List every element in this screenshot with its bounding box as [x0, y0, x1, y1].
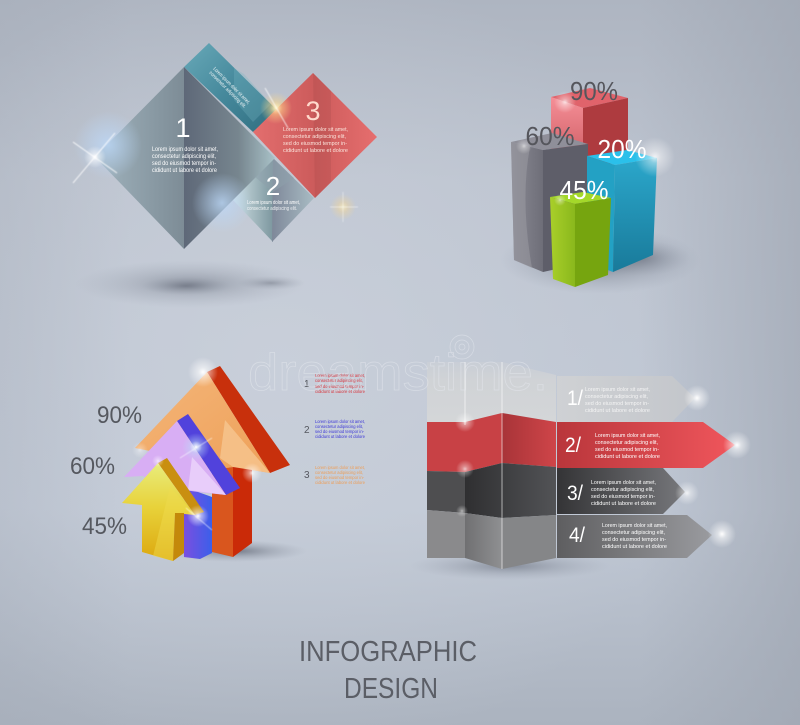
diamond 1: cididunt ut labore et dolore — [152, 168, 218, 174]
percentage labels: 45% — [82, 513, 127, 540]
legend item 2: Lorem ipsum dolor sit amet, — [315, 419, 365, 424]
percentage labels: 90% — [97, 402, 142, 429]
ribbon arrow 3: Lorem ipsum dolor sit amet, — [591, 480, 656, 486]
title — [299, 636, 477, 705]
ribbon arrow 2: consectetur adipiscing elit, — [595, 440, 658, 446]
ribbon arrow 2: Lorem ipsum dolor sit amet, — [595, 433, 660, 439]
value labels: 60% — [526, 121, 574, 151]
ribbon arrow 4: cididunt ut labore et dolore — [602, 544, 667, 550]
diamond 3: consectetur adipiscing elit, — [283, 134, 346, 140]
ribbon arrow 4 — [557, 515, 712, 558]
diamond 3: 3 — [305, 96, 321, 126]
ribbon arrow 4: sed do eiusmod tempor in- — [602, 537, 666, 543]
legend item 1: cididunt ut labore et dolore — [315, 389, 366, 394]
ribbon arrow 2: 2/ — [565, 434, 581, 457]
diamond 3 — [253, 73, 377, 198]
panel: 3D bar chart — [500, 76, 700, 294]
ribbon arrow 1: cididunt ut labore et dolore — [585, 408, 650, 414]
ribbon arrow 3 — [557, 468, 685, 514]
title: INFOGRAPHIC — [299, 636, 477, 668]
diamond 1: Lorem ipsum dolor sit amet, — [152, 147, 218, 153]
diamond 1 — [95, 67, 275, 249]
panel: folded ribbon infographic — [410, 362, 751, 580]
diamond 2: 2 — [266, 171, 280, 201]
diamond 2: Lorem ipsum dolor sit amet, — [247, 200, 300, 206]
arrows shadow — [163, 540, 307, 562]
legend item 1: Lorem ipsum dolor sit amet, — [315, 373, 365, 378]
diamond 3: cididunt ut labore et dolore — [283, 148, 348, 154]
bar: red 90% — [551, 88, 628, 170]
legend item 2: sed do eiusmod tempor in- — [315, 429, 365, 434]
diamond 3: sed do eiusmod tempor in- — [283, 141, 347, 147]
folded block — [427, 362, 556, 569]
legend item 2: 2 — [304, 425, 310, 436]
ribbon shadow — [410, 552, 610, 580]
ribbon arrow 2 — [557, 422, 735, 468]
teal ribbon — [184, 43, 277, 132]
legend item 3: cididunt ut labore et dolore — [315, 480, 366, 485]
ribbon flares — [455, 385, 751, 548]
legend item 3: 3 — [304, 470, 310, 481]
legend item 3: consectetur adipiscing elit, — [315, 470, 363, 475]
legend list — [304, 373, 366, 485]
ribbon arrow 3: consectetur adipiscing elit, — [591, 487, 654, 493]
diamond 1: sed do eiusmod tempor in- — [152, 161, 216, 167]
ribbon arrow 1: 1/ — [567, 387, 583, 410]
arrow: orange/red 90% — [135, 366, 290, 557]
value labels — [526, 76, 646, 205]
chart shadow — [500, 226, 700, 294]
diamond 1: 1 — [175, 113, 191, 143]
arrow flares — [132, 357, 262, 530]
value labels: 90% — [570, 76, 618, 106]
diamond 2: consectetur adipiscing elit. — [247, 206, 297, 212]
legend item 2: cididunt ut labore et dolore — [315, 434, 366, 439]
panel: diamond infographic — [73, 43, 377, 308]
legend item 2 — [304, 419, 366, 439]
teal ribbon: Lorem ipsum dolor sit amet, — [212, 66, 251, 106]
watermark: dreamstime. — [248, 344, 548, 402]
title: DESIGN — [344, 673, 438, 705]
light flares — [73, 88, 358, 233]
legend item 1: sed do eiusmod tempor in- — [315, 384, 365, 389]
percentage labels: 60% — [70, 453, 115, 480]
ribbon arrow 3: cididunt ut labore et dolore — [591, 501, 656, 507]
bar: grey 60% — [511, 133, 588, 272]
legend item 1: 1 — [304, 379, 310, 390]
ribbon arrow 1: sed do eiusmod tempor in- — [585, 401, 649, 407]
diamond 1: consectetur adipiscing elit, — [152, 154, 216, 160]
legend item 1: consectetur adipiscing elit, — [315, 378, 363, 383]
teal ribbon: consectetur adipiscing elit. — [208, 70, 247, 110]
ribbon arrow 4: 4/ — [569, 524, 585, 547]
panel: 3D arrows — [70, 357, 366, 562]
legend item 2: consectetur adipiscing elit, — [315, 424, 363, 429]
value labels: 45% — [560, 175, 608, 205]
legend item 3: sed do eiusmod tempor in- — [315, 475, 365, 480]
arrow: yellow 45% — [122, 458, 204, 561]
bar: blue 20% — [587, 137, 675, 272]
value labels: 20% — [598, 134, 646, 164]
legend item 3 — [304, 465, 366, 485]
ribbon arrow 3: sed do eiusmod tempor in- — [591, 494, 655, 500]
ribbon arrow 2: sed do eiusmod tempor in- — [595, 447, 659, 453]
diamond 3: Lorem ipsum dolor sit amet, — [283, 127, 348, 133]
bar: green 45% — [550, 192, 611, 287]
floating shadow — [75, 260, 305, 308]
ribbon arrow 4: consectetur adipiscing elit, — [602, 530, 665, 536]
ribbon arrow 3: 3/ — [567, 482, 583, 505]
percentage labels — [70, 402, 142, 540]
arrow: purple 60% — [124, 414, 240, 559]
ribbon arrow 1 — [557, 376, 695, 422]
legend item 3: Lorem ipsum dolor sit amet, — [315, 465, 365, 470]
ribbon arrow 4: Lorem ipsum dolor sit amet, — [602, 523, 667, 529]
diamond 2 — [233, 158, 314, 242]
ribbon arrow 1: consectetur adipiscing elit, — [585, 394, 648, 400]
legend item 1 — [304, 373, 366, 394]
ribbon arrow 2: cididunt ut labore et dolore — [595, 454, 660, 460]
ribbon arrow 1: Lorem ipsum dolor sit amet, — [585, 387, 650, 393]
